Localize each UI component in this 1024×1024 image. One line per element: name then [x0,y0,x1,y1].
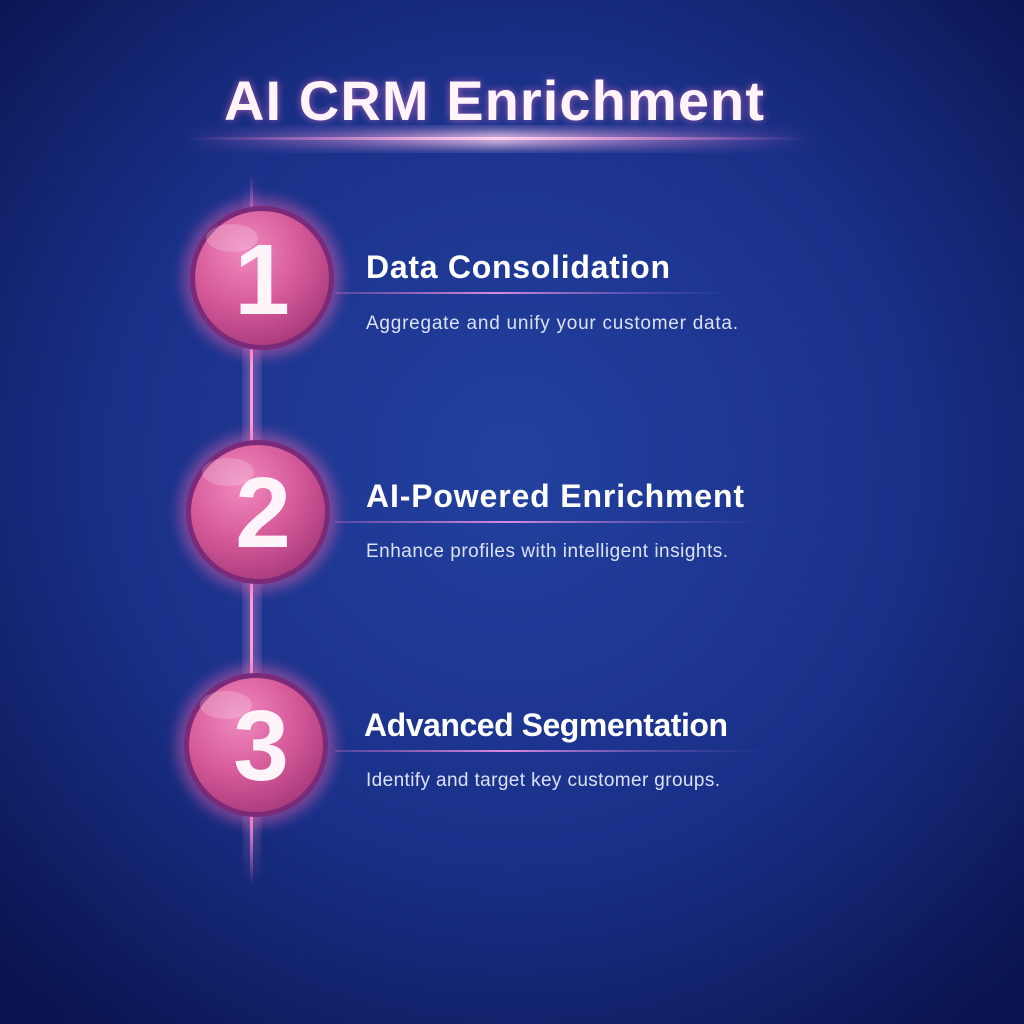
step 2 [178,432,765,592]
heading 2: AI-Powered Enrichment [366,478,744,514]
description 2: Enhance profiles with intelligent insights. [366,541,728,562]
heading 3: Advanced Segmentation [364,707,728,743]
icon: number badge 3: 3 [233,690,289,802]
step 1 [182,198,738,358]
icon: number badge 1: 1 [234,224,290,336]
description 3: Identify and target key customer groups. [366,770,720,791]
heading 1: Data Consolidation [366,249,670,285]
title: AI CRM Enrichment [224,69,764,132]
icon: number badge 3 [176,665,336,825]
step 3 [176,665,765,825]
icon: number badge 2: 2 [235,457,291,569]
title: AI CRM Enrichment [224,69,764,132]
icon: number badge 2 [178,432,338,592]
description 1: Aggregate and unify your customer data. [366,313,738,334]
icon: number badge 1 [182,198,342,358]
timeline line [247,175,257,885]
title glow line [185,132,810,146]
